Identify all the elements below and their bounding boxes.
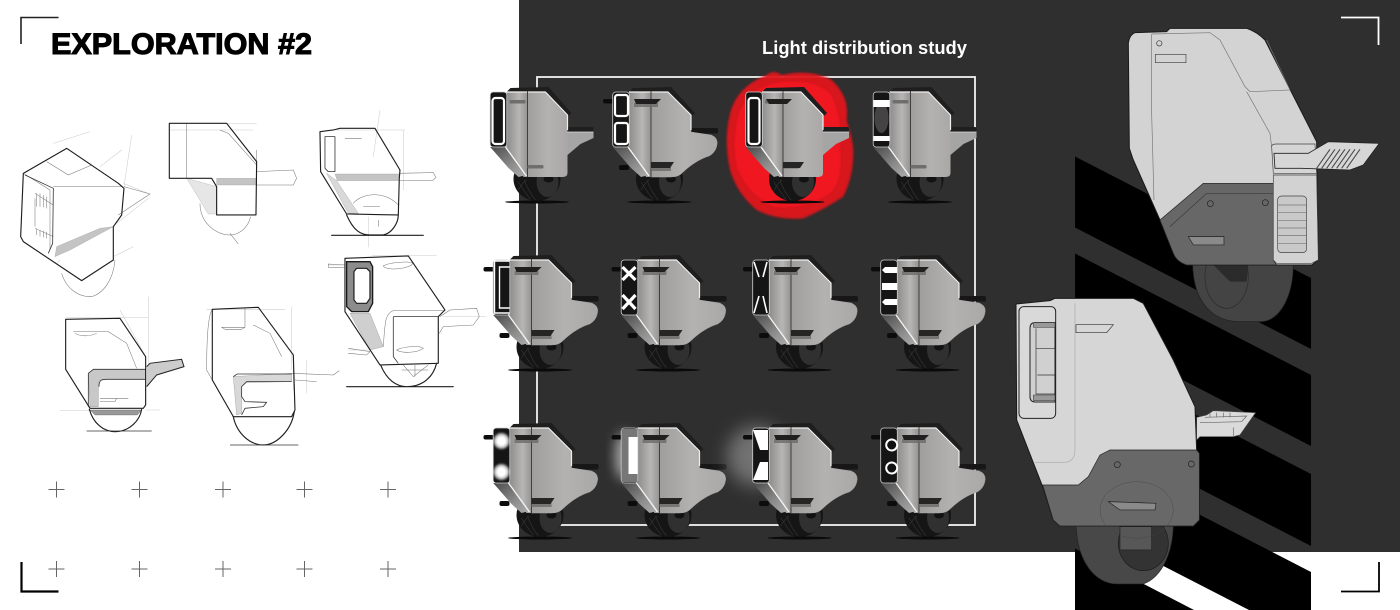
wheel [1076,523,1173,584]
vehicle row 3 column 1: glowing round lights [484,423,598,540]
body shell [1128,28,1318,265]
vent panel [1273,175,1318,263]
vehicle row 3 column 4: circle outline lights [871,423,986,540]
sketch: side view lower centre [207,307,339,445]
vehicle row 3 column 3: glowing wedge lights [727,423,858,540]
corner bracket bottom left [22,562,58,592]
vehicle row 1 column 4: two white bars [873,87,976,204]
footrest pedal [1272,142,1379,173]
title: EXPLORATION #2 [51,28,312,61]
front light housing [1019,307,1056,418]
study frame [537,77,975,525]
vehicle row 2 column 1: double outline light [484,255,598,372]
vehicle row 1 column 3: highlighted ring light [746,87,849,204]
registration crosses [48,482,396,577]
dark background panel [519,0,1400,552]
vehicle row 1 column 2: two ring lights [603,87,718,204]
red glow highlight [727,72,853,219]
wheel [1193,263,1293,322]
sketch: side view upper right [320,110,436,247]
surface details [1152,33,1290,245]
vehicle row 2 column 4: stripe lights [871,255,986,372]
lower dark cover [1160,183,1277,265]
large vehicle rendering upper [1128,28,1379,322]
corner bracket top right [1341,18,1378,45]
sketches group [21,110,486,445]
vehicle row 2 column 3: hourglass light [743,255,858,372]
vehicle row 1 column 1: ring light [490,87,594,204]
sketch: side view upper centre [169,123,297,244]
sketch: front light view right [328,256,486,387]
corner bracket bottom right [1341,562,1379,592]
vehicle row 3 column 2: glowing vertical bar [612,423,726,540]
vehicle row 2 column 2: cross lights [612,255,726,372]
surface details [1035,303,1194,538]
diagonal black stripes [1075,156,1311,610]
sketch: side view lower left [60,297,184,432]
lower dark cover [1043,450,1199,526]
footrest pedal [1197,411,1256,440]
light distribution heading: Light distribution study [762,38,967,58]
corner bracket top left [21,18,58,44]
sketch: three quarter view [21,132,150,297]
large vehicle rendering lower [1016,298,1256,584]
body shell [1016,298,1199,526]
